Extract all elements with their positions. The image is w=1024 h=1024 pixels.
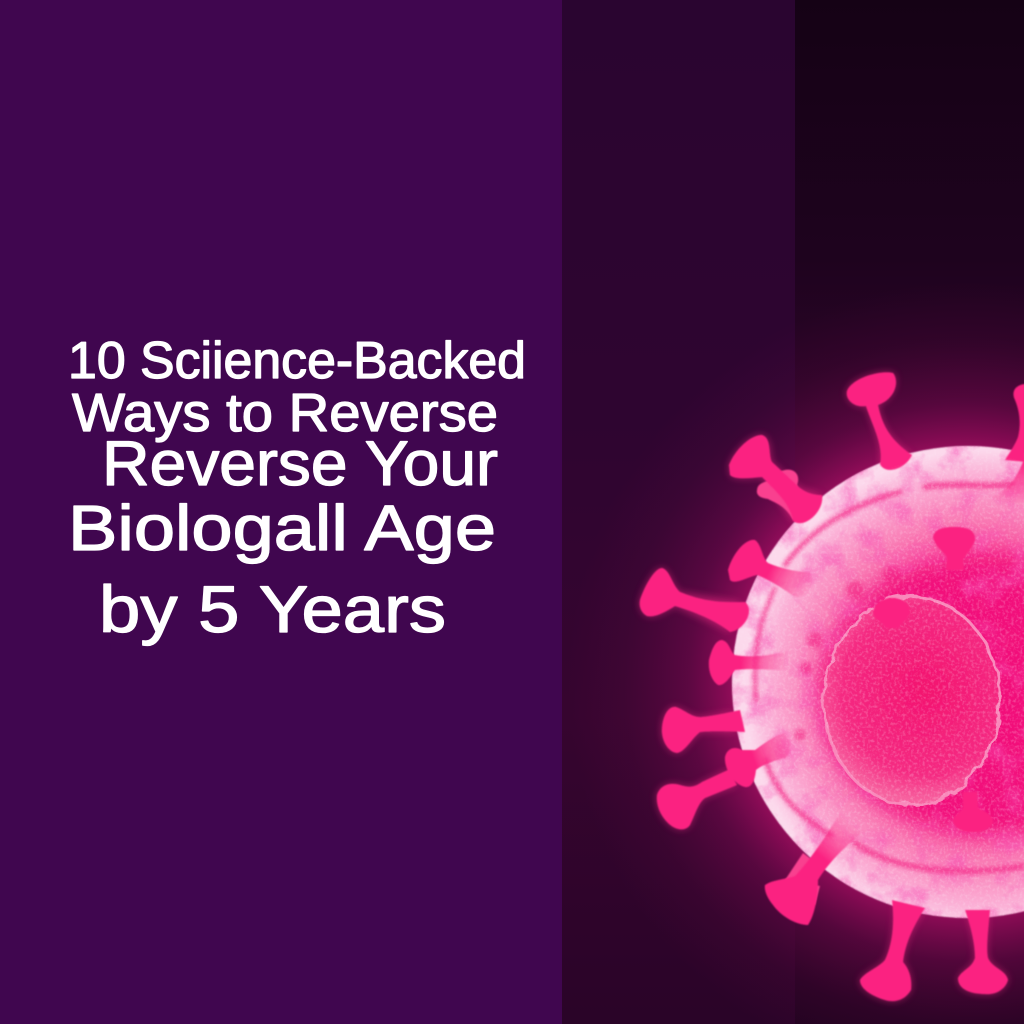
spikes in front of the cell (640, 372, 1024, 1001)
inner pink mass (818, 557, 1024, 833)
mottled blotches (730, 445, 1024, 920)
spike lower left (765, 808, 866, 925)
spike bottom 2 (958, 910, 1008, 994)
nucleus (824, 597, 1000, 805)
cell body (730, 445, 1024, 920)
illustration: glowing pink cell (618, 324, 1024, 1024)
spike top right (1005, 384, 1024, 462)
bud on nucleus (873, 598, 910, 628)
inner buds (873, 527, 993, 832)
bud upper (933, 527, 975, 570)
title line 1: 10 Sciience-Backed (68, 332, 526, 390)
spike bottom 1 (860, 900, 925, 1001)
spike top (847, 372, 912, 470)
fine grain (730, 445, 1024, 920)
spike left 6 (725, 733, 790, 787)
title line 3: Reverse Your (102, 429, 498, 499)
spike halo (640, 372, 1008, 1001)
panel: left purple background (0, 0, 562, 1024)
spike left 1 (728, 540, 812, 597)
spike left 5 (657, 770, 737, 829)
spike left 4 (662, 707, 745, 753)
membrane bands (755, 484, 1024, 871)
title line 2: Ways to Reverse (72, 383, 498, 443)
spikes behind the cell (757, 470, 820, 905)
surface pits (794, 566, 1020, 741)
spike right (992, 457, 1024, 515)
bud lower (953, 792, 993, 832)
spike upper left (729, 435, 822, 523)
spike left 3 (709, 640, 794, 685)
title line 4: Biologall Age (68, 492, 496, 564)
spike left 2 (640, 568, 749, 632)
outer glow (568, 282, 1024, 1024)
title line 5: by 5 Years (99, 572, 446, 646)
panel: middle dark background (562, 0, 795, 1024)
panel: right darkest background (795, 0, 1024, 1024)
